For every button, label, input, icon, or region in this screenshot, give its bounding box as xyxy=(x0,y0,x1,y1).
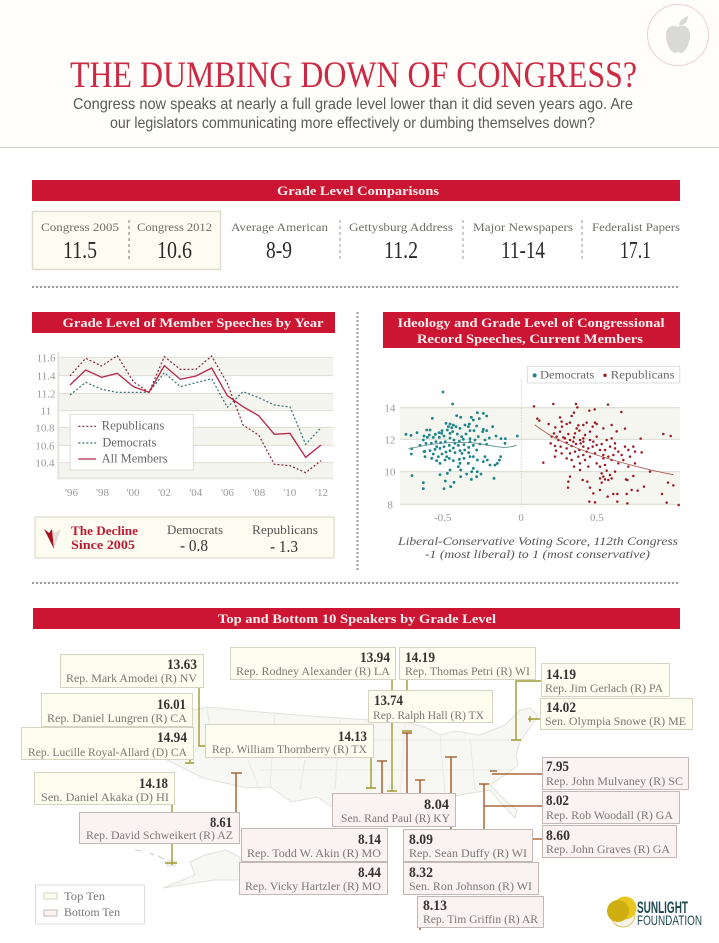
line chart xyxy=(35,352,333,499)
line chart: '02 xyxy=(158,487,171,499)
scatter plot: 10 xyxy=(384,467,396,479)
label: mark amodei xyxy=(60,654,204,688)
label: john mulvaney xyxy=(542,758,688,790)
panel: grade level comparisons xyxy=(32,180,680,270)
line chart: 10.6 xyxy=(35,440,55,452)
stat: average american: 8-9 xyxy=(266,238,292,264)
label: todd akin: Rep. Todd W. Akin (R) MO xyxy=(247,846,381,860)
scatter plot xyxy=(384,366,680,524)
label: tim griffin xyxy=(418,896,544,928)
label: tim griffin: Rep. Tim Griffin (R) AR xyxy=(423,912,538,926)
series: all members xyxy=(70,366,321,457)
label: mark amodei: Rep. Mark Amodei (R) NV xyxy=(66,671,197,685)
stat: gettysburg address: Gettysburg Address xyxy=(349,220,453,234)
label: ron johnson: 8.32 xyxy=(409,865,433,881)
label: rob woodall: Rep. Rob Woodall (R) GA xyxy=(546,808,673,822)
label: rodney alexander xyxy=(230,648,396,680)
section heading: member speeches xyxy=(32,312,335,333)
map legend: Top Ten xyxy=(64,891,105,903)
label: john mulvaney: Rep. John Mulvaney (R) SC xyxy=(546,774,683,788)
icon: down arrow xyxy=(44,529,61,549)
label: william thornberry: Rep. William Thornberry (R) TX xyxy=(212,742,367,756)
axis caption: Liberal-Conservative Voting Score, 112th Congress xyxy=(397,534,678,548)
title: THE DUMBING DOWN OF CONGRESS? xyxy=(70,55,637,96)
label: olympia snowe: 14.02 xyxy=(546,700,576,716)
label: lucille royal-allard: Rep. Lucille Royal-Allard (D) CA xyxy=(28,745,187,759)
callout: the decline since 2005: - 0.8 xyxy=(180,536,208,555)
panel: ideology and grade level xyxy=(383,312,680,561)
label: sean duffy xyxy=(404,830,532,862)
axis caption xyxy=(397,534,678,561)
label: william thornberry: 14.13 xyxy=(338,729,367,745)
callout: the decline since 2005: Republicans xyxy=(252,522,318,537)
label: thomas petri: Rep. Thomas Petri (R) WI xyxy=(405,664,530,678)
label: ron johnson: Sen. Ron Johnson (R) WI xyxy=(409,879,532,893)
stat: major newspapers: Major Newspapers xyxy=(473,220,573,234)
section heading: ideology xyxy=(383,312,680,348)
trend lines xyxy=(408,442,517,449)
map legend xyxy=(36,885,144,924)
header background xyxy=(0,0,719,148)
stat: federalist papers xyxy=(592,220,680,264)
chart legend xyxy=(70,414,193,470)
series: democrats xyxy=(70,373,321,444)
section heading: speakers: Top and Bottom 10 Speakers by Grade Level xyxy=(218,611,496,626)
scatter plot: 0.5 xyxy=(590,512,604,524)
map of the united states xyxy=(135,707,538,888)
label: daniel lungren xyxy=(42,694,192,726)
label: rand paul xyxy=(332,794,456,826)
axis caption: -1 (most liberal) to 1 (most conservative) xyxy=(425,547,650,561)
label: ralph hall: 13.74 xyxy=(374,693,403,709)
stat: average american: Average American xyxy=(231,220,328,234)
line chart: '10 xyxy=(283,487,297,499)
label: jim gerlach xyxy=(542,664,670,696)
label: thomas petri xyxy=(400,648,536,680)
label: daniel lungren: 16.01 xyxy=(157,697,186,713)
panel: grade level of member speeches by year xyxy=(32,312,335,558)
scatter plot: 14 xyxy=(384,403,396,415)
section heading: grade level comparisons: Grade Level Comparisons xyxy=(277,183,439,198)
label: david schweikert xyxy=(80,812,240,844)
chart legend: Republicans xyxy=(102,419,165,433)
scatter plot: -0.5 xyxy=(434,512,452,524)
stat: federalist papers: Federalist Papers xyxy=(592,220,680,234)
label: sean duffy: 8.09 xyxy=(409,832,433,848)
label: john graves: Rep. John Graves (R) GA xyxy=(546,842,670,856)
label: ron johnson xyxy=(404,862,538,894)
section heading: ideology: Record Speeches, Current Members xyxy=(417,331,643,346)
stat: gettysburg address xyxy=(349,220,453,264)
line chart: 11 xyxy=(41,406,51,418)
label: daniel lungren: Rep. Daniel Lungren (R) CA xyxy=(47,711,187,725)
label: rodney alexander: 13.94 xyxy=(360,650,390,666)
scatter plot: 0 xyxy=(518,512,524,524)
label: lucille royal-allard xyxy=(22,728,194,760)
callout: the decline since 2005: The Decline xyxy=(71,524,138,538)
label: jim gerlach: 14.19 xyxy=(546,667,576,683)
label: thomas petri: 14.19 xyxy=(405,650,435,666)
label: todd akin xyxy=(242,828,388,862)
line chart: '00 xyxy=(127,487,140,499)
stat: gettysburg address: 11.2 xyxy=(384,238,418,264)
label: david schweikert: Rep. David Schweikert (R) AZ xyxy=(86,828,233,842)
callout: the decline since 2005: - 1.3 xyxy=(270,537,298,556)
label: tim griffin: 8.13 xyxy=(423,898,447,914)
line chart: '04 xyxy=(189,487,203,499)
scatter plot: 12 xyxy=(384,434,395,446)
label: vicky hartzler: 8.44 xyxy=(358,865,381,881)
map legend: Bottom Ten xyxy=(64,907,120,919)
series: republicans points xyxy=(534,404,679,505)
line chart: 11.6 xyxy=(37,352,56,364)
chart legend: Democrats xyxy=(102,436,157,450)
label: ralph hall: Rep. Ralph Hall (R) TX xyxy=(373,708,484,722)
label: john graves xyxy=(542,826,676,858)
highlight box: congress 2005 and 2012: 11.5 xyxy=(63,238,97,264)
label: john mulvaney: 7.95 xyxy=(546,759,569,775)
line chart: '12 xyxy=(315,487,328,499)
label: daniel akaka: 14.18 xyxy=(139,776,168,792)
label: ralph hall xyxy=(368,690,492,722)
label: mark amodei: 13.63 xyxy=(167,657,197,673)
label: sean duffy: Rep. Sean Duffy (R) WI xyxy=(409,846,527,860)
connector lines xyxy=(165,679,542,930)
label: rodney alexander: Rep. Rodney Alexander (R) LA xyxy=(236,664,390,678)
label: rand paul: Sen. Rand Paul (R) KY xyxy=(341,811,450,825)
section heading: ideology: Ideology and Grade Level of Congressional xyxy=(398,315,665,330)
line chart: '96 xyxy=(65,487,78,499)
scatter plot: 8 xyxy=(387,499,393,511)
label: vicky hartzler: Rep. Vicky Hartzler (R) MO xyxy=(245,879,381,893)
callout: the decline since 2005: Since 2005 xyxy=(71,538,135,552)
label: jim gerlach: Rep. Jim Gerlach (R) PA xyxy=(545,681,663,695)
label: david schweikert: 8.61 xyxy=(210,815,232,831)
subtitle: our legislators communicating more effectively or dumbing themselves down? xyxy=(110,115,595,132)
chart legend: All Members xyxy=(102,452,168,466)
callout: the decline since 2005 xyxy=(35,517,334,558)
label: john graves: 8.60 xyxy=(546,828,570,844)
scatter legend: Democrats xyxy=(540,369,595,382)
label: rand paul: 8.04 xyxy=(424,797,449,813)
stat: federalist papers: 17.1 xyxy=(620,238,651,264)
highlight box: congress 2005 and 2012 xyxy=(32,212,220,270)
label: olympia snowe xyxy=(540,698,692,730)
highlight box: congress 2005 and 2012: Congress 2012 xyxy=(137,220,212,234)
line chart: 10.4 xyxy=(35,458,55,470)
series: democrats points xyxy=(406,392,517,489)
label: william thornberry xyxy=(206,724,374,758)
label: vicky hartzler xyxy=(240,862,388,894)
scatter legend xyxy=(527,366,680,383)
callout: the decline since 2005: Democrats xyxy=(167,522,223,537)
subtitle: Congress now speaks at nearly a full grade level lower than it did seven years ago. Are xyxy=(73,96,633,113)
section heading: speakers xyxy=(33,608,680,629)
scatter legend: Republicans xyxy=(611,369,675,382)
label: rob woodall: 8.02 xyxy=(546,793,569,809)
series: republicans xyxy=(70,356,321,473)
icon: apple badge xyxy=(648,4,708,66)
label: daniel akaka xyxy=(34,772,174,804)
label: lucille royal-allard: 14.94 xyxy=(157,730,187,746)
line chart: 11.2 xyxy=(37,388,55,400)
label: daniel akaka: Sen. Daniel Akaka (D) HI xyxy=(41,790,169,804)
section heading: grade level comparisons xyxy=(32,180,680,201)
line chart: 11.4 xyxy=(37,371,56,383)
panel: top and bottom 10 speakers xyxy=(22,608,692,930)
highlight box: congress 2005 and 2012: Congress 2005 xyxy=(41,220,119,234)
line chart: '08 xyxy=(252,487,266,499)
subtitle xyxy=(73,96,633,132)
line chart: 10.8 xyxy=(35,422,55,434)
line chart: '06 xyxy=(221,487,234,499)
label: rob woodall xyxy=(542,792,680,824)
stat: major newspapers: 11-14 xyxy=(501,238,545,264)
section heading: member speeches: Grade Level of Member Speeches by Year xyxy=(62,315,324,330)
logo: sunlight foundation xyxy=(607,896,702,928)
line chart: '98 xyxy=(96,487,109,499)
label: olympia snowe: Sen. Olympia Snowe (R) ME xyxy=(545,714,686,728)
stat: major newspapers xyxy=(473,220,573,264)
highlight box: congress 2005 and 2012: 10.6 xyxy=(157,238,192,264)
stat: average american xyxy=(231,220,328,264)
label: todd akin: 8.14 xyxy=(358,832,381,848)
